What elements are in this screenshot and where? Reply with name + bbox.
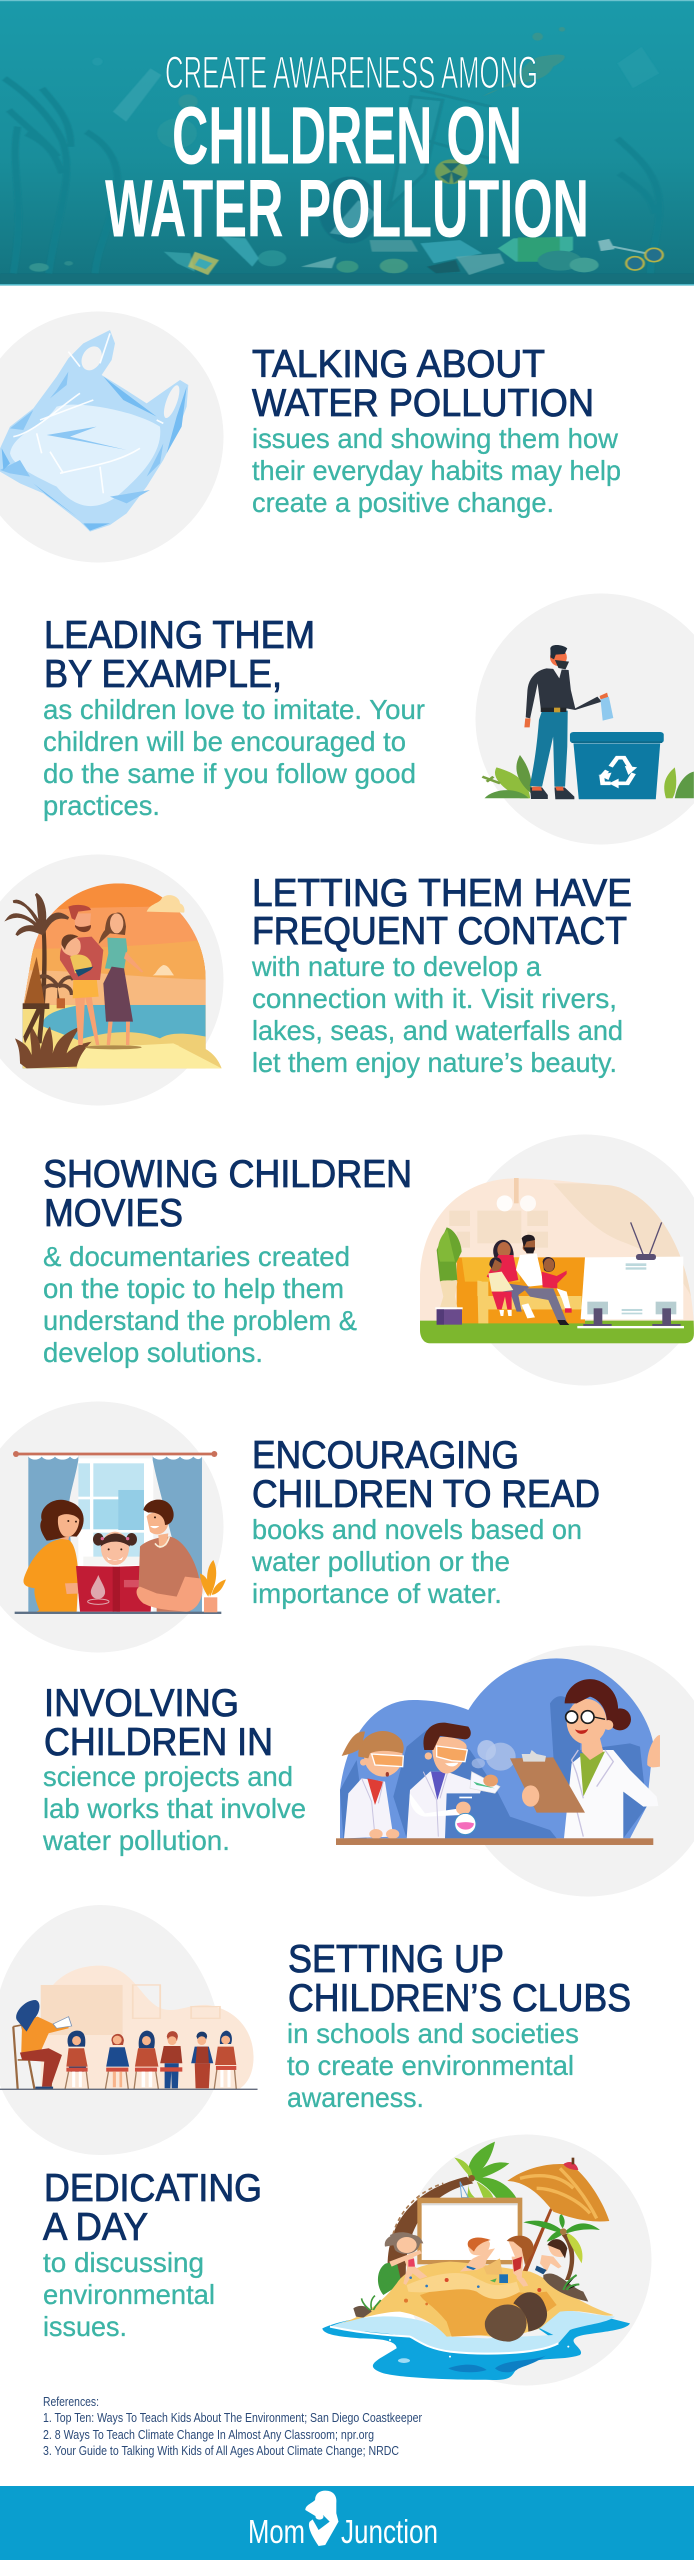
circle background	[400, 2134, 652, 2386]
title	[105, 47, 589, 254]
panel: showing children movies	[43, 1134, 694, 1386]
icon: island with children	[322, 2142, 630, 2380]
circle background	[0, 1402, 224, 1652]
heading	[44, 1159, 410, 1227]
body text: to create environmental	[287, 2050, 574, 2081]
references: References:	[43, 2395, 99, 2409]
blob background	[0, 1905, 221, 2155]
heading	[46, 620, 312, 692]
heading: CHILDREN’S CLUBS	[288, 1977, 631, 2020]
body text	[43, 1241, 357, 1368]
heading: MOVIES	[44, 1192, 183, 1235]
body text: connection with it. Visit rivers,	[252, 983, 617, 1014]
references: 2. 8 Ways To Teach Climate Change In Almost Any Classroom; npr.org	[43, 2428, 374, 2442]
heading: BY EXAMPLE,	[44, 653, 282, 696]
circle background	[460, 1646, 694, 1896]
logo: MomJunction: Junction	[341, 2513, 438, 2550]
body text: issues.	[43, 2311, 127, 2342]
body text	[42, 1761, 306, 1856]
circle background	[460, 1134, 694, 1386]
header banner	[0, 0, 694, 286]
body text: their everyday habits may help	[252, 455, 621, 486]
body text: & documentaries created	[43, 1241, 350, 1272]
heading: SHOWING CHILDREN	[43, 1153, 412, 1196]
references: 1. Top Ten: Ways To Teach Kids About The Environment; San Diego Coastkeeper	[43, 2411, 422, 2425]
body text: as children love to imitate. Your	[43, 694, 425, 725]
heading: DEDICATING	[44, 2167, 262, 2210]
heading	[253, 1440, 599, 1508]
body text: books and novels based on	[252, 1514, 582, 1545]
heading: TALKING ABOUT	[252, 343, 545, 386]
circle background	[0, 854, 224, 1106]
body text	[251, 951, 623, 1078]
body text: let them enjoy nature’s beauty.	[252, 1047, 617, 1078]
body text: importance of water.	[252, 1578, 502, 1609]
body text: awareness.	[287, 2082, 424, 2113]
body text: practices.	[43, 790, 160, 821]
panel: dedicating a day	[43, 2134, 652, 2386]
heading: ENCOURAGING	[252, 1434, 519, 1477]
heading: WATER POLLUTION	[252, 382, 594, 425]
body text: science projects and	[43, 1761, 293, 1792]
icon: family on the beach	[4, 883, 222, 1068]
heading	[254, 878, 631, 952]
icon: man recycling a bottle	[482, 645, 694, 799]
body text	[287, 2018, 579, 2113]
heading	[252, 350, 592, 417]
panel: letting them have frequent contact	[0, 854, 632, 1106]
heading: A DAY	[43, 2206, 148, 2249]
body text: create a positive change.	[252, 487, 554, 518]
panel: encouraging children to read	[0, 1402, 600, 1652]
icon: parents reading with child	[13, 1451, 226, 1614]
body text: in schools and societies	[287, 2018, 579, 2049]
body text: with nature to develop a	[251, 951, 541, 982]
icon: plastic bag	[0, 330, 188, 532]
circle background	[0, 312, 224, 562]
body text: on the topic to help them	[43, 1273, 344, 1304]
panel: leading them by example	[43, 594, 694, 844]
body text: understand the problem &	[43, 1305, 357, 1336]
heading	[289, 1944, 630, 2012]
heading: CHILDREN IN	[44, 1721, 273, 1764]
body text: develop solutions.	[43, 1337, 263, 1368]
body text: environmental	[43, 2279, 215, 2310]
body text	[251, 1514, 582, 1609]
heading	[44, 1682, 273, 1764]
body text: do the same if you follow good	[43, 758, 416, 789]
heading: CHILDREN TO READ	[252, 1473, 600, 1516]
icon: children's club classroom	[0, 1966, 258, 2090]
body text: issues and showing them how	[252, 423, 619, 454]
body text: water pollution or the	[251, 1546, 510, 1577]
body text	[43, 2247, 215, 2342]
heading	[43, 2167, 262, 2249]
panel: setting up children's clubs	[0, 1905, 631, 2155]
circle background	[476, 594, 694, 844]
panel: talking about water pollution	[0, 312, 621, 562]
heading: LETTING THEM HAVE	[252, 872, 632, 915]
body text: lakes, seas, and waterfalls and	[252, 1015, 623, 1046]
references	[43, 2395, 422, 2458]
body text: lab works that involve	[43, 1793, 306, 1824]
heading: SETTING UP	[288, 1938, 504, 1981]
logo: MomJunction: Mom	[248, 2513, 305, 2550]
panel: involving children in science	[42, 1646, 694, 1896]
references: 3. Your Guide to Talking With Kids of All Ages About Climate Change; NRDC	[43, 2444, 399, 2458]
icon: family watching television	[420, 1170, 694, 1344]
body text	[43, 694, 425, 821]
body text: children will be encouraged to	[43, 726, 406, 757]
icon: lab scientists	[336, 1658, 660, 1845]
body text	[252, 423, 621, 518]
body text: water pollution.	[42, 1825, 230, 1856]
heading: INVOLVING	[44, 1682, 239, 1725]
logo: MomJunction	[248, 2491, 438, 2550]
body text: to discussing	[43, 2247, 204, 2278]
heading: LEADING THEM	[44, 614, 315, 657]
heading: FREQUENT CONTACT	[252, 910, 627, 953]
footer	[0, 2486, 694, 2560]
